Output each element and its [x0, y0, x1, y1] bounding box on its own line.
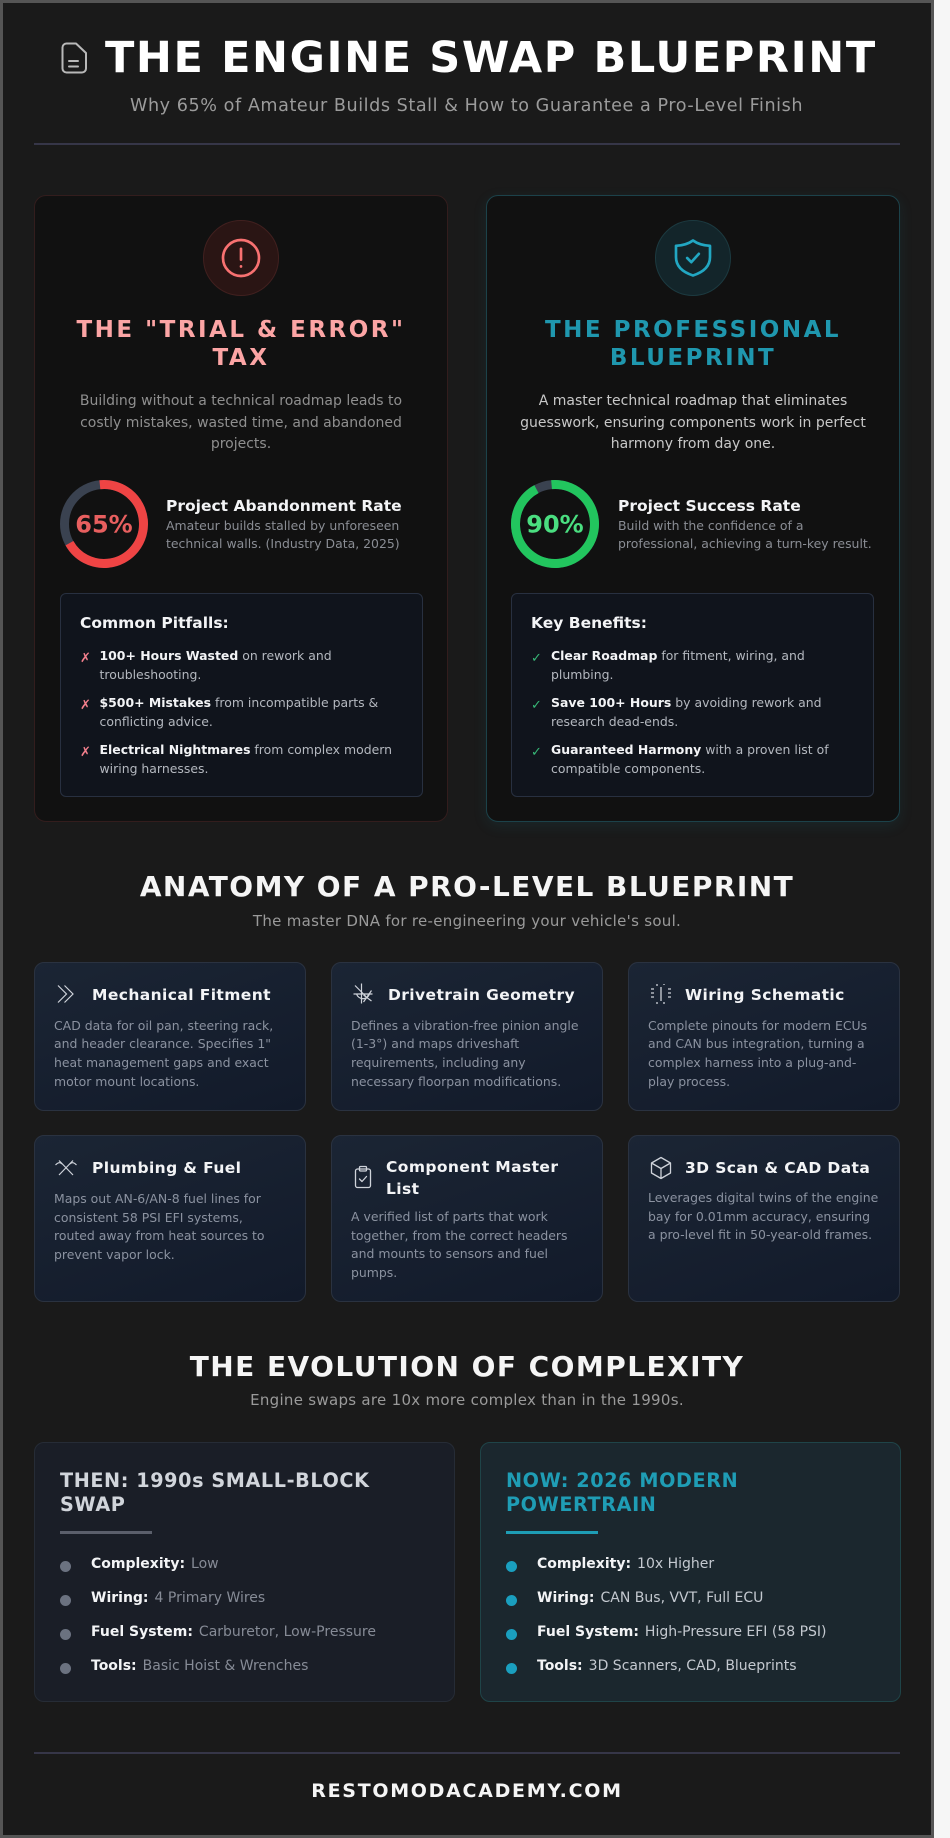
item text: compatible components.: [551, 761, 705, 776]
bullet: [60, 1560, 71, 1572]
item text: plumbing.: [551, 667, 613, 682]
row: Wiring: 4 Primary Wires: [91, 1590, 265, 1606]
heading: benefits: Key Benefits:: [531, 614, 647, 632]
icon: chevrons: [58, 985, 74, 1003]
item text: [551, 742, 829, 776]
card title: Plumbing & Fuel: [92, 1158, 241, 1176]
card text: CAD data for oil pan, steering rack,: [54, 1018, 273, 1032]
card text: and CAN bus integration, turning a: [648, 1036, 865, 1051]
item: ✗: [80, 650, 91, 666]
card text: together, from the correct headers: [351, 1228, 568, 1243]
card text: pumps.: [351, 1265, 397, 1280]
icon: cube: [650, 1156, 672, 1180]
card: 3d scan and cad data: [628, 1135, 900, 1302]
card text: necessary floorpan modifications.: [351, 1074, 561, 1089]
row: Tools: Basic Hoist & Wrenches: [91, 1658, 308, 1674]
card text: play process.: [648, 1074, 730, 1089]
card text: A verified list of parts that work: [351, 1209, 548, 1224]
card title: Drivetrain Geometry: [388, 986, 575, 1004]
card text: a pro-level fit in 50-year-old frames.: [648, 1227, 872, 1242]
chart: 90 percent ring: [511, 480, 599, 568]
subheading: evolution: Engine swaps are 10x more complex than in the 1990s.: [250, 1391, 684, 1409]
heading: anatomy: ANATOMY OF A PRO-LEVEL BLUEPRINT: [140, 870, 794, 903]
item text: [100, 648, 332, 682]
stat: abandonment rate: Project Abandonment Rate: [166, 496, 402, 514]
card text: Leverages digital twins of the engine: [648, 1190, 878, 1205]
item text: wiring harnesses.: [100, 761, 208, 776]
card title: 3D Scan & CAD Data: [685, 1158, 870, 1176]
heading: professional blueprint: [545, 317, 841, 371]
stat: abandonment rate: technical walls. (Industry Data, 2025): [166, 536, 400, 551]
card text: Maps out AN-6/AN-8 fuel lines for: [54, 1191, 261, 1206]
stat: success rate: [618, 496, 872, 551]
card title: Mechanical Fitment: [92, 986, 271, 1004]
chart: 65 percent ring: 65%: [75, 510, 133, 538]
text: professional description: A master technical roadmap that eliminates: [539, 393, 847, 409]
card: mechanical fitment: [34, 962, 306, 1111]
heading: then: SWAP: [60, 1493, 125, 1516]
card text: heat management gaps and exact: [54, 1055, 269, 1070]
panel: professional blueprint: [486, 195, 900, 822]
card text: motor mount locations.: [54, 1074, 199, 1089]
card title: List: [386, 1180, 419, 1198]
card text: [351, 1209, 568, 1280]
item text: [551, 695, 822, 729]
row: Tools: 3D Scanners, CAD, Blueprints: [537, 1658, 796, 1674]
heading: pitfalls: Common Pitfalls:: [80, 614, 229, 632]
header: [62, 33, 877, 116]
heading: trial and error: [76, 317, 406, 371]
card text: Complete pinouts for modern ECUs: [648, 1018, 867, 1032]
card text: [54, 1018, 273, 1089]
card: component master list: [331, 1135, 603, 1302]
card text: [648, 1018, 867, 1089]
item text: research dead-ends.: [551, 714, 678, 729]
bullet: [506, 1663, 517, 1674]
card text: bay for 0.01mm accuracy, ensuring: [648, 1209, 870, 1224]
stat: abandonment rate: Amateur builds stalled by unforeseen: [166, 518, 399, 532]
panel: common pitfalls: [60, 593, 423, 797]
heading: professional blueprint: BLUEPRINT: [610, 345, 776, 371]
chart: 65 percent ring: [60, 480, 148, 568]
item text: [100, 742, 392, 776]
chart: 90 percent ring: 90%: [526, 510, 584, 538]
underline: then: [60, 1531, 152, 1534]
heading: now: [506, 1468, 738, 1516]
icon: shield badge: [655, 220, 731, 296]
row: Wiring: CAN Bus, VVT, Full ECU: [537, 1590, 763, 1606]
bullet: [60, 1594, 71, 1606]
panel: now: [480, 1442, 901, 1702]
icon: geometry: [354, 984, 372, 1004]
subheading: anatomy: The master DNA for re-engineering your vehicle's soul.: [253, 912, 681, 930]
bullet: [506, 1628, 517, 1640]
heading: now: NOW: 2026 MODERN: [506, 1468, 738, 1492]
item: ✓: [531, 650, 542, 666]
panel: then: [34, 1442, 455, 1702]
item text: [100, 695, 378, 729]
stat: abandonment rate: [166, 496, 402, 551]
icon: alert badge: [203, 220, 279, 296]
item text: Electrical Nightmares from complex modern: [100, 742, 392, 757]
stat: success rate: professional, achieving a turn-key result.: [618, 536, 872, 551]
bullet: [506, 1560, 517, 1572]
card text: complex harness into a plug-and-: [648, 1055, 856, 1070]
item: ✗: [80, 745, 91, 760]
item: ✗: [80, 698, 91, 713]
card text: prevent vapor lock.: [54, 1247, 175, 1262]
card title: Wiring Schematic: [685, 986, 845, 1004]
item: ✓: [531, 745, 542, 760]
card text: requirements, including any: [351, 1055, 526, 1070]
icon: wiring: [651, 984, 671, 1004]
heading: trial and error: THE "TRIAL & ERROR": [76, 317, 406, 343]
card text: routed away from heat sources to: [54, 1228, 265, 1243]
text: trial description: Building without a technical roadmap leads to: [80, 393, 402, 409]
bullet: [506, 1594, 517, 1606]
underline: now: [506, 1531, 598, 1534]
panel: trial and error tax: [34, 195, 448, 822]
item text: $500+ Mistakes from incompatible parts &: [100, 695, 378, 710]
item: ✓: [531, 698, 542, 713]
text: professional description: [520, 393, 866, 452]
card: wiring schematic: [628, 962, 900, 1111]
text: trial description: projects.: [211, 436, 271, 452]
card text: [351, 1018, 578, 1089]
icon: document: [62, 42, 87, 74]
item text: Clear Roadmap for fitment, wiring, and: [551, 648, 805, 663]
card title: [386, 1158, 558, 1198]
card text: Defines a vibration-free pinion angle: [351, 1018, 578, 1032]
heading: then: THEN: 1990s SMALL-BLOCK: [60, 1468, 370, 1492]
item text: troubleshooting.: [100, 667, 201, 682]
card title: Component Master: [386, 1158, 558, 1176]
text: trial description: [80, 393, 402, 452]
icon: crossed lines: [55, 1160, 77, 1176]
card text: consistent 58 PSI EFI systems,: [54, 1210, 243, 1225]
card text: and mounts to sensors and fuel: [351, 1246, 548, 1261]
heading: professional blueprint: THE PROFESSIONAL: [545, 317, 841, 343]
heading: then: [60, 1468, 370, 1516]
heading: trial and error: TAX: [213, 345, 269, 371]
item text: [551, 648, 805, 682]
heading: now: POWERTRAIN: [506, 1493, 656, 1516]
item text: Save 100+ Hours by avoiding rework and: [551, 695, 822, 710]
panel: key benefits: [511, 593, 874, 797]
icon: clipboard: [354, 1166, 372, 1188]
subtitle: Why 65% of Amateur Builds Stall & How to Guarantee a Pro-Level Finish: [130, 96, 803, 116]
text: trial description: costly mistakes, wasted time, and abandoned: [80, 415, 402, 431]
card text: [648, 1190, 878, 1242]
item text: Guaranteed Harmony with a proven list of: [551, 742, 829, 757]
row: Fuel System: High-Pressure EFI (58 PSI): [537, 1624, 827, 1640]
text: professional description: harmony from day one.: [611, 436, 775, 452]
heading: evolution: THE EVOLUTION OF COMPLEXITY: [190, 1350, 744, 1383]
item text: 100+ Hours Wasted on rework and: [100, 648, 332, 663]
item text: conflicting advice.: [100, 714, 213, 729]
card text: [54, 1191, 265, 1262]
text: professional description: guesswork, ensuring components work in perfect: [520, 415, 866, 431]
bullet: [60, 1628, 71, 1640]
row: Complexity: 10x Higher: [537, 1556, 714, 1572]
stat: success rate: Project Success Rate: [618, 496, 801, 514]
card: plumbing and fuel: [34, 1135, 306, 1302]
card text: (1-3°) and maps driveshaft: [351, 1036, 519, 1051]
row: Complexity: Low: [91, 1556, 219, 1572]
footer: RESTOMODACADEMY.COM: [311, 1780, 623, 1802]
card text: and header clearance. Specifies 1": [54, 1036, 271, 1051]
stat: success rate: Build with the confidence of a: [618, 518, 803, 532]
title: THE ENGINE SWAP BLUEPRINT: [105, 33, 877, 83]
card: drivetrain geometry: [331, 962, 603, 1111]
bullet: [60, 1663, 71, 1674]
row: Fuel System: Carburetor, Low-Pressure: [91, 1624, 376, 1640]
